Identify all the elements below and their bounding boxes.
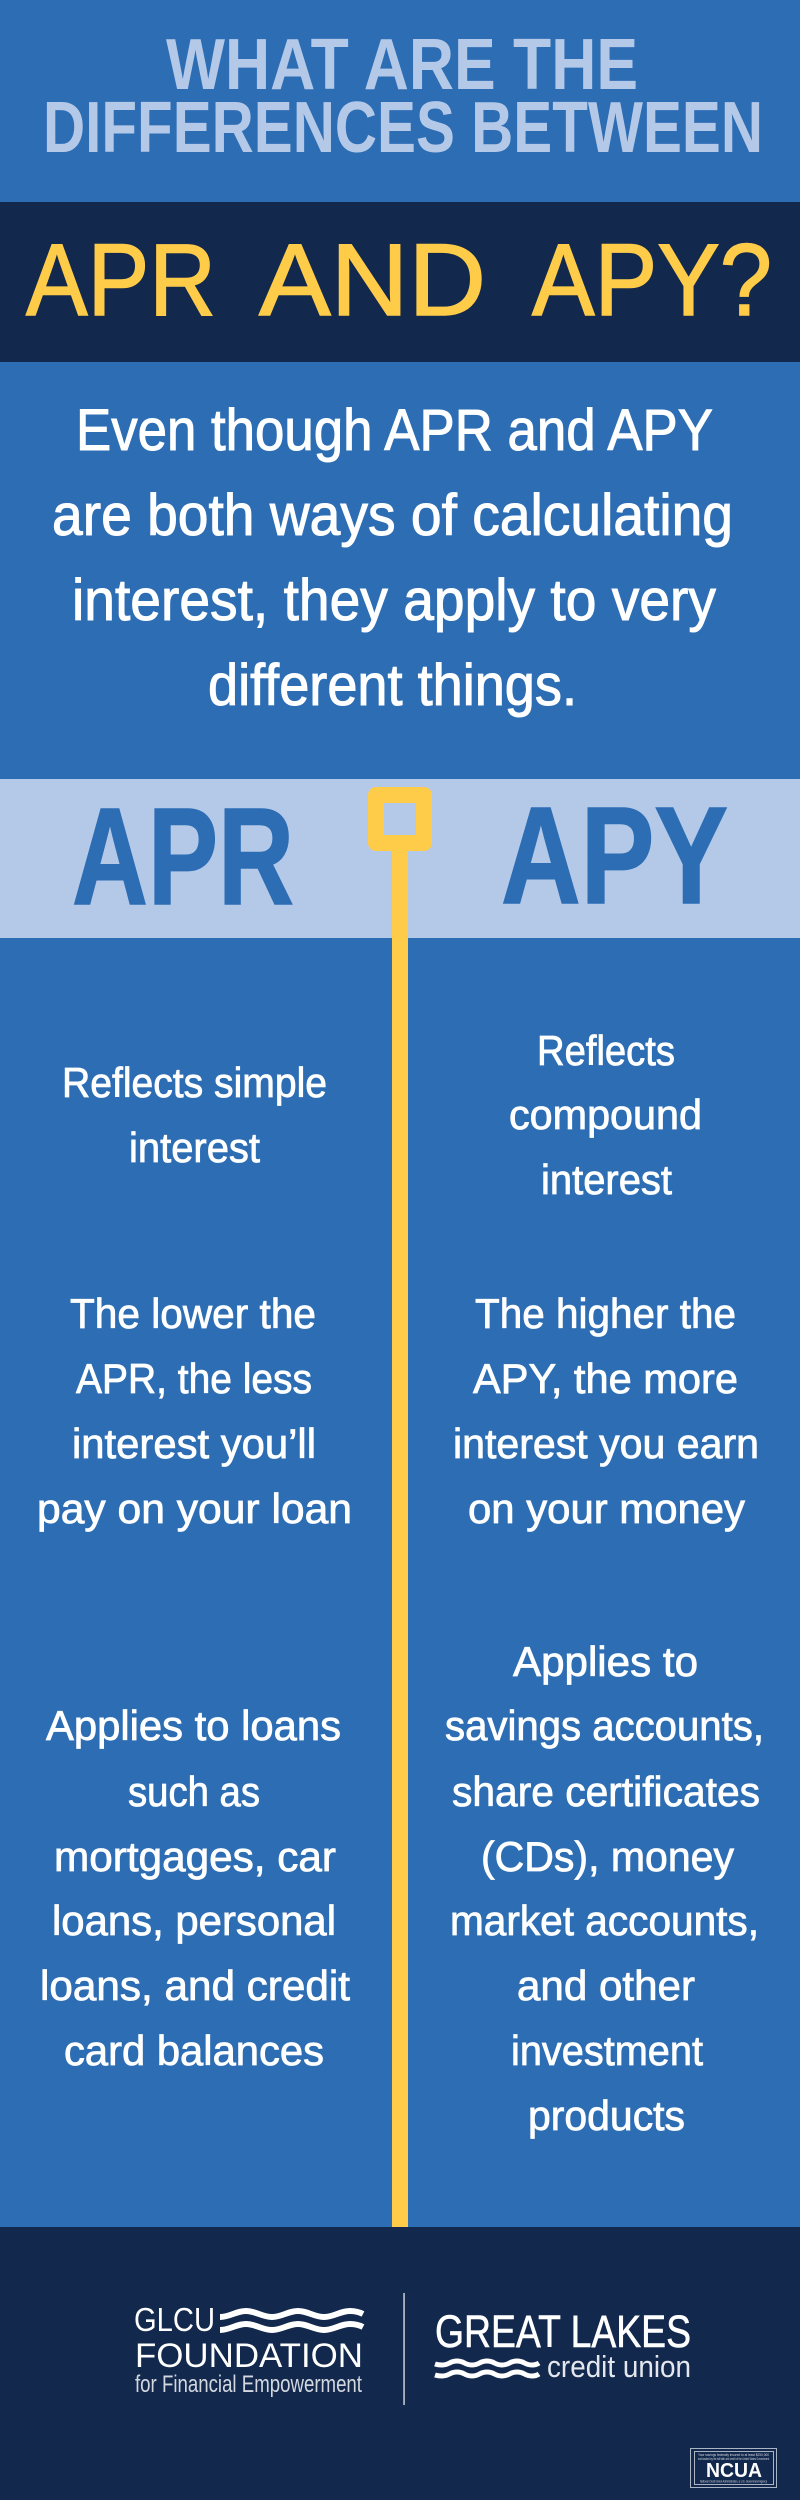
APR column: applies to loans: such as xyxy=(128,1768,260,1815)
APR column: lower APR xyxy=(37,1290,352,1532)
NCUA badge: Your savings federally insured to at least $250,000 xyxy=(698,2453,769,2457)
APY column: higher APY: on your money xyxy=(468,1485,745,1532)
NCUA badge xyxy=(690,2448,776,2488)
APR column: applies to loans: Applies to loans xyxy=(46,1702,341,1749)
APY column: applies to savings: and other xyxy=(517,1962,695,2009)
GLCU Foundation logo: FOUNDATION xyxy=(135,2337,363,2375)
APY column: applies to savings: (CDs), money xyxy=(481,1833,734,1880)
comparison header band xyxy=(0,779,800,938)
APR column: applies to loans: loans, and credit xyxy=(40,1962,350,2009)
comparison header band: APR xyxy=(72,780,294,934)
title banner: APR and APY: APR xyxy=(26,223,216,337)
APR column: lower APR: APR, the less xyxy=(76,1355,312,1402)
Great Lakes Credit Union logo: GREAT LAKES xyxy=(435,2306,691,2357)
APR column: lower APR: interest you’ll xyxy=(72,1420,316,1467)
APY column: compound interest: interest xyxy=(541,1156,672,1203)
APY column: compound interest: Reflects xyxy=(537,1027,675,1074)
title: what are the differences between xyxy=(43,25,763,168)
APY column: applies to savings: products xyxy=(528,2092,685,2139)
APY column: compound interest xyxy=(509,1027,702,1203)
GLCU Foundation logo: for Financial Empowerment xyxy=(135,2371,362,2398)
APY column: applies to savings: savings accounts, xyxy=(445,1702,764,1749)
APR column: simple interest: Reflects simple xyxy=(62,1059,327,1106)
APR column: lower APR: The lower the xyxy=(70,1290,316,1337)
APR column: lower APR: pay on your loan xyxy=(37,1485,352,1532)
APY column: higher APY: APY, the more xyxy=(473,1355,738,1402)
APR column: applies to loans xyxy=(40,1702,350,2074)
NCUA badge: National Credit Union Administration, a U.S. Government Agency xyxy=(700,2480,767,2484)
NCUA badge: NCUA xyxy=(706,2460,762,2482)
APY column: applies to savings: Applies to xyxy=(513,1638,698,1685)
Great Lakes Credit Union logo: credit union xyxy=(547,2349,691,2384)
title: what are the differences between: WHAT ARE THE xyxy=(166,25,638,105)
APR column: simple interest: interest xyxy=(129,1124,260,1171)
comparison header band: APY xyxy=(501,779,728,933)
intro text block: different things. xyxy=(208,653,577,718)
intro text block: Even though APR and APY xyxy=(76,398,713,463)
APY column: higher APY xyxy=(453,1290,759,1532)
APR column: applies to loans: loans, personal xyxy=(52,1897,336,1944)
APY column: higher APY: interest you earn xyxy=(453,1420,759,1467)
intro text block: interest, they apply to very xyxy=(72,568,716,633)
APY column: applies to savings: market accounts, xyxy=(450,1897,759,1944)
GLCU Foundation logo xyxy=(134,2301,363,2398)
footer panel xyxy=(0,2227,800,2500)
APR column: applies to loans: card balances xyxy=(64,2027,324,2074)
GLCU Foundation logo: GLCU xyxy=(134,2301,215,2338)
APY column: applies to savings: share certificates xyxy=(452,1768,760,1815)
APY column: higher APY: The higher the xyxy=(475,1290,736,1337)
APY column: applies to savings xyxy=(445,1638,764,2139)
yellow divider with square marker xyxy=(376,795,424,2227)
APY column: compound interest: compound xyxy=(509,1091,702,1138)
APY column: applies to savings: investment xyxy=(511,2027,703,2074)
APR column: applies to loans: mortgages, car xyxy=(54,1833,336,1880)
title banner: APR and APY: APY? xyxy=(532,223,772,337)
logo divider xyxy=(403,2293,405,2405)
intro text block: are both ways of calculating xyxy=(52,483,733,548)
title banner: APR and APY: AND xyxy=(259,223,486,337)
Great Lakes Credit Union logo xyxy=(435,2306,691,2384)
title banner: APR and APY xyxy=(0,202,800,362)
APR column: simple interest xyxy=(62,1059,327,1171)
intro text block xyxy=(52,398,733,718)
